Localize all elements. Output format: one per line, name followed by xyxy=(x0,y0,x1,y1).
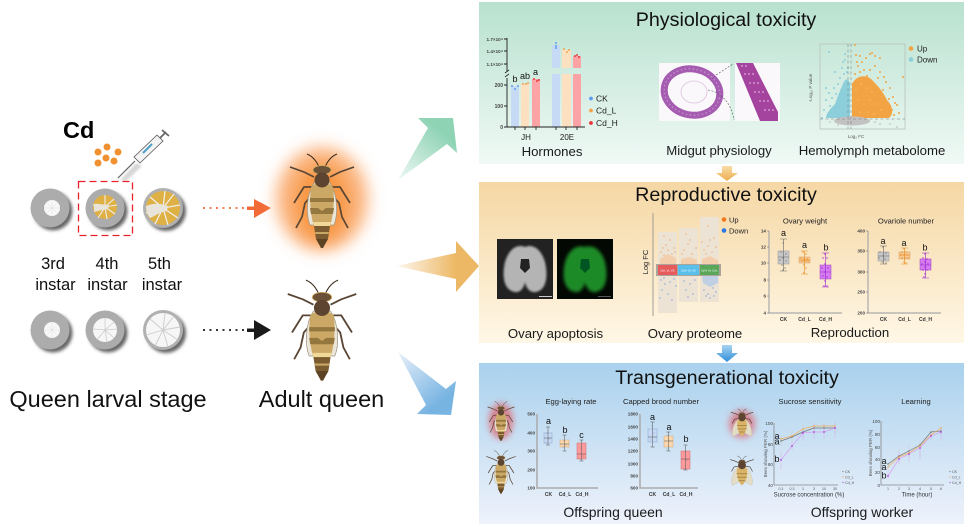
heading: reproductive toxicity: Reproductive toxicity xyxy=(635,184,817,206)
labels: instar stages: instar xyxy=(142,276,183,294)
icon: exposed offspring queen xyxy=(488,401,514,441)
box plot: egg-laying rate: Cd_L xyxy=(559,492,571,498)
box plot: ovary weight xyxy=(761,216,842,323)
bar chart: hormones: 1.4×10⁴ xyxy=(487,49,504,54)
arrow: to physiological toxicity xyxy=(398,118,457,180)
line chart: sucrose sensitivity: 0.3 xyxy=(790,487,794,491)
line chart: sucrose sensitivity: Cd_L xyxy=(845,476,854,480)
arrow: blue between panels xyxy=(716,345,738,362)
caption: adult queen: Adult queen xyxy=(259,386,384,412)
box plot: capped brood number: Cd_H xyxy=(679,492,693,498)
line chart: sucrose sensitivity: 3 xyxy=(813,487,815,491)
box plot: egg-laying rate: Cd_H xyxy=(575,492,589,498)
legend: proteome: Up xyxy=(729,216,739,224)
bar chart: hormones: JH xyxy=(521,133,531,142)
box plot: ovary weight: Ovary weight xyxy=(783,216,828,226)
box plot: egg-laying rate: c xyxy=(579,430,584,440)
image: ovary bright field xyxy=(497,239,553,299)
line chart: learning: Cd_L xyxy=(952,476,961,480)
box plot: ovariole number: b xyxy=(922,242,928,252)
box plot: egg-laying rate xyxy=(527,397,598,498)
volcano plot: hemolymph metabolome: Log₂ FC xyxy=(848,134,865,139)
line chart: learning: CK xyxy=(952,470,958,474)
box plot: ovary weight: 4 xyxy=(763,310,766,316)
box plot: ovariole number: Cd_H xyxy=(919,317,932,323)
caption: midgut physiology: Midgut physiology xyxy=(666,143,772,158)
line chart: learning: 5 xyxy=(930,487,932,491)
box plot: ovariole number: Cd_L xyxy=(898,317,911,323)
line chart: sucrose sensitivity: 40 xyxy=(768,483,773,488)
bar chart: hormones: 1.7×10⁴ xyxy=(487,37,504,42)
line chart: sucrose sensitivity: Bees showing PER (%) xyxy=(763,430,768,477)
image: midgut histology xyxy=(659,63,780,121)
line chart: sucrose sensitivity: 80 xyxy=(768,442,773,447)
box plot: capped brood number: 600 xyxy=(630,486,638,490)
line chart: learning xyxy=(868,397,962,498)
box plot: ovary weight: Cd_L xyxy=(798,317,811,323)
box plot: capped brood number: b xyxy=(683,434,689,444)
box plot: egg-laying rate: 200 xyxy=(527,468,535,472)
icon: control offspring queen xyxy=(486,450,516,494)
box plot: ovariole number: 400 xyxy=(857,228,865,234)
box plot: ovariole number: a xyxy=(901,238,907,248)
arrow: to transgenerational toxicity xyxy=(398,352,456,415)
box plot: ovary weight: b xyxy=(823,242,829,252)
larvae row: control xyxy=(30,310,186,353)
labels: instar stages xyxy=(35,255,183,294)
box plot: ovariole number: 250 xyxy=(857,290,865,294)
line chart: learning: 0 xyxy=(877,483,880,488)
line chart: sucrose sensitivity: 1 xyxy=(802,487,804,491)
chart: ovary proteome: Cd-H Vs. CK xyxy=(681,268,696,272)
chart: ovary proteome xyxy=(641,213,721,316)
line chart: sucrose sensitivity: Cd_H xyxy=(845,481,855,485)
bar chart: hormones xyxy=(487,37,585,142)
line chart: sucrose sensitivity: b xyxy=(774,454,780,464)
icon: control offspring worker xyxy=(730,456,754,485)
box plot: ovary weight: 10 xyxy=(761,260,766,266)
heading: transgenerational toxicity: Transgenerational toxicity xyxy=(615,367,839,389)
box plot: capped brood number: 1600 xyxy=(628,424,638,430)
panel: transgenerational toxicity xyxy=(479,363,964,524)
line chart: sucrose sensitivity: 0.1 xyxy=(778,487,784,491)
box plot: ovary weight: a xyxy=(781,228,786,238)
icon: cadmium particles xyxy=(94,144,122,166)
labels: instar stages: instar xyxy=(35,276,76,294)
box plot: capped brood number: 1200 xyxy=(628,448,638,454)
line chart: learning: 1 xyxy=(887,487,889,491)
line chart: learning: 100 xyxy=(872,419,880,424)
box plot: capped brood number: Cd_L xyxy=(663,492,675,498)
line chart: learning: 3 xyxy=(908,487,910,491)
legend: hormones: CK xyxy=(596,94,608,104)
labels: instar stages: 5th xyxy=(148,255,171,273)
image: ovary fluorescence xyxy=(557,239,613,299)
labels: instar stages: instar xyxy=(87,276,128,294)
icon: control adult queen xyxy=(288,280,356,381)
box plot: ovariole number xyxy=(857,216,941,323)
line chart: learning: Bees showing PER (%) xyxy=(868,429,873,476)
box plot: ovary weight: CK xyxy=(780,317,787,323)
bar chart: hormones: b xyxy=(512,74,518,84)
line chart: learning: 80 xyxy=(875,432,880,437)
box plot: capped brood number: 800 xyxy=(630,474,638,478)
box plot: ovary weight: Cd_H xyxy=(819,317,832,323)
box plot: capped brood number: 1800 xyxy=(628,412,638,416)
box plot: egg-laying rate: b xyxy=(562,425,568,435)
icon: syringe xyxy=(118,130,169,181)
caption: hemolymph metabolome: Hemolymph metabolome xyxy=(799,143,945,158)
box plot: ovariole number: 350 xyxy=(857,248,865,254)
larvae row: Cd treated xyxy=(30,188,186,231)
box plot: capped brood number: 1000 xyxy=(628,462,638,466)
caption: ovary proteome: Ovary proteome xyxy=(648,326,742,341)
volcano plot: hemolymph metabolome: -Log₁₀ P value xyxy=(808,73,813,102)
bar chart: hormones: a xyxy=(533,67,538,77)
labels: instar stages: 4th xyxy=(96,255,118,273)
box plot: capped brood number: CK xyxy=(649,492,656,498)
box plot: ovary weight: 12 xyxy=(761,244,766,250)
line chart: learning: b xyxy=(881,470,887,480)
box plot: capped brood number: a xyxy=(650,412,655,422)
line chart: learning: Time (hour) xyxy=(902,492,932,498)
bar chart: hormones: 1.1×10⁴ xyxy=(487,62,504,67)
line chart: sucrose sensitivity: a xyxy=(774,431,780,441)
box plot: egg-laying rate: 500 xyxy=(527,412,535,416)
box plot: egg-laying rate: CK xyxy=(545,492,552,498)
line chart: sucrose sensitivity: a xyxy=(774,436,780,446)
caption: reproduction: Reproduction xyxy=(811,325,889,340)
box plot: capped brood number: a xyxy=(666,422,672,432)
line chart: learning: 60 xyxy=(875,445,880,450)
line chart: sucrose sensitivity: 60 xyxy=(768,462,773,467)
caption: queen larval stage: Queen larval stage xyxy=(9,386,207,412)
box plot: egg-laying rate: 300 xyxy=(527,448,535,454)
box plot: ovariole number: a xyxy=(880,236,886,246)
line chart: sucrose sensitivity: 30 xyxy=(833,487,837,491)
box plot: capped brood number: Capped brood number xyxy=(623,397,699,406)
box plot: capped brood number xyxy=(623,397,699,498)
box plot: egg-laying rate: Egg-laying rate xyxy=(545,397,597,406)
box plot: ovary weight: 6 xyxy=(763,294,766,298)
legend: hormones xyxy=(589,94,618,128)
panel: reproductive toxicity xyxy=(479,182,964,343)
box plot: ovary weight: a xyxy=(802,240,807,250)
line chart: learning: Cd_H xyxy=(952,481,962,485)
box plot: ovariole number: Ovariole number xyxy=(878,216,935,226)
legend: hormones: Cd_H xyxy=(596,118,618,128)
caption: ovary apoptosis: Ovary apoptosis xyxy=(508,326,604,341)
line chart: sucrose sensitivity: CK xyxy=(845,470,851,474)
legend: volcano: Up xyxy=(917,44,928,54)
line chart: learning: 6 xyxy=(940,487,942,491)
line chart: sucrose sensitivity xyxy=(763,397,855,498)
line chart: learning: a xyxy=(881,456,887,466)
caption: offspring worker: Offspring worker xyxy=(811,504,914,520)
arrow: orange between panels xyxy=(716,166,738,181)
volcano plot: hemolymph metabolome xyxy=(808,44,905,139)
box plot: ovary weight: 14 xyxy=(761,228,766,234)
box plot: egg-laying rate: a xyxy=(546,416,551,426)
line chart: learning: 20 xyxy=(875,470,880,475)
box plot: ovariole number: 200 xyxy=(857,310,865,316)
arrow: orange dotted xyxy=(203,199,271,218)
heading: physiological toxicity: Physiological toxicity xyxy=(636,9,816,31)
labels: instar stages: 3rd xyxy=(41,255,65,273)
box plot: egg-laying rate: 400 xyxy=(527,430,535,436)
line chart: learning: 4 xyxy=(919,487,921,491)
bar chart: hormones: ab xyxy=(520,71,530,81)
panel: physiological toxicity xyxy=(479,2,964,164)
box plot: egg-laying rate: 100 xyxy=(527,486,535,490)
icon: Cd exposed adult queen with glow xyxy=(276,147,368,251)
line chart: sucrose sensitivity: 100 xyxy=(765,421,773,426)
arrow: black dotted xyxy=(203,320,271,340)
box plot: ovary weight: 8 xyxy=(763,278,766,282)
line chart: sucrose sensitivity: Sucrose sensitivity xyxy=(779,397,842,406)
chart: ovary proteome: Cd-H Vs. Cd-L xyxy=(701,268,718,272)
bar chart: hormones: 20E xyxy=(560,133,574,142)
bar chart: hormones: 0 xyxy=(500,125,503,131)
legend: proteome: Down xyxy=(729,226,748,236)
legend: volcano: Down xyxy=(917,56,937,64)
line chart: learning: Learning xyxy=(901,397,931,406)
legend: volcano xyxy=(909,44,937,64)
legend: proteome xyxy=(722,216,748,236)
line chart: learning: 40 xyxy=(875,457,880,462)
bar chart: hormones: 200 xyxy=(495,83,503,89)
line chart: sucrose sensitivity: Sucrose concentration (%) xyxy=(774,492,844,498)
legend: hormones: Cd_L xyxy=(596,106,617,116)
injected stage highlight box xyxy=(78,182,132,236)
label: Cd: Cd xyxy=(63,117,94,143)
bar chart: hormones: 100 xyxy=(495,104,503,110)
icon: exposed offspring worker xyxy=(729,409,755,438)
box plot: ovariole number: 300 xyxy=(857,270,865,274)
line chart: learning: a xyxy=(881,462,887,472)
chart: ovary proteome: Log FC xyxy=(641,249,650,274)
box plot: ovariole number: CK xyxy=(880,317,887,323)
line chart: sucrose sensitivity: 10 xyxy=(822,487,826,491)
chart: ovary proteome: Cd-L Vs. CK xyxy=(660,268,675,272)
box plot: capped brood number: 1400 xyxy=(628,436,638,442)
line chart: learning: 2 xyxy=(898,487,900,491)
caption: hormones: Hormones xyxy=(522,144,583,159)
arrow: to reproductive toxicity xyxy=(396,241,479,292)
caption: offspring queen: Offspring queen xyxy=(563,504,663,520)
